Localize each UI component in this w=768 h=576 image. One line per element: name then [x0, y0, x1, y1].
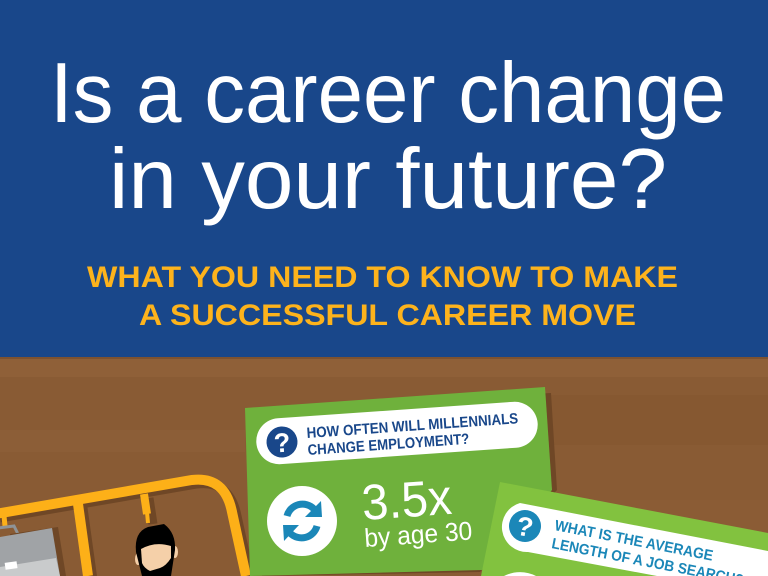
question text: HOW OFTEN WILL MILLENNIALS: [306, 410, 519, 442]
panel: job search card: [481, 482, 768, 576]
question pill: [255, 400, 539, 466]
frame: yellow org chart lines: [0, 480, 246, 576]
title: [50, 46, 726, 227]
icon: refresh: [267, 486, 337, 556]
icon: question mark: ?: [514, 511, 536, 543]
frame shadow: [0, 484, 251, 576]
stat: 3.5x by age 30: 3.5x: [360, 469, 454, 531]
icon: question mark: ?: [273, 427, 291, 459]
stat: 3.5x by age 30: [360, 469, 473, 553]
icon: briefcase: [0, 526, 66, 576]
subtitle: WHAT YOU NEED TO KNOW TO MAKE: [87, 261, 678, 294]
question text: WHAT IS THE AVERAGE: [553, 517, 715, 565]
wood desk background: [0, 357, 768, 576]
question text: CHANGE EMPLOYMENT?: [307, 431, 470, 459]
panel: millennials card: [245, 387, 557, 576]
header panel: [0, 0, 768, 358]
stat: 3.5x by age 30: by age 30: [363, 516, 473, 553]
icon: white circle: [504, 572, 536, 576]
icon: question mark: [506, 507, 544, 545]
title: Is a career change: [50, 46, 726, 141]
icon: question mark: [265, 425, 299, 459]
icon: bearded man: [135, 524, 178, 576]
question pill: [502, 503, 768, 576]
title: in your future?: [109, 132, 667, 227]
question text: [306, 410, 519, 459]
subtitle: A SUCCESSFUL CAREER MOVE: [139, 299, 636, 332]
subtitle: [87, 261, 678, 332]
